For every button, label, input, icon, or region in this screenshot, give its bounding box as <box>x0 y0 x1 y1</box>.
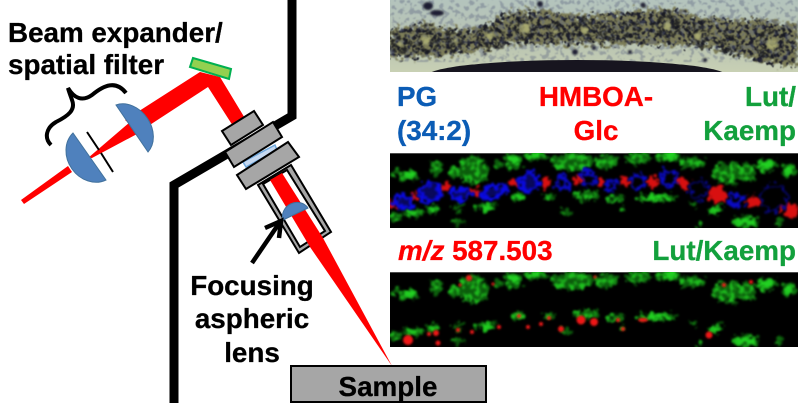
laser beam path <box>21 72 246 204</box>
mirror <box>190 58 231 79</box>
lens: focusing aspheric lens <box>282 202 308 220</box>
optical micrograph <box>390 0 798 72</box>
label: beam expander: Beam expander/ <box>8 17 223 48</box>
MS image: m/z 587.503, Lut/Kaemp <box>390 271 798 347</box>
arrow: to focusing lens <box>252 221 281 263</box>
lens tube <box>258 165 331 253</box>
label: m/z 587.503: m/z 587.503 <box>398 235 553 266</box>
sample block <box>291 366 486 402</box>
label: PG (34:2): (34:2) <box>397 115 471 146</box>
flange block 3 <box>237 142 299 189</box>
pinhole spatial filter <box>87 132 113 172</box>
label: focusing aspheric lens: aspheric <box>195 303 309 334</box>
flange block 2 <box>225 122 282 167</box>
label: HMBOA-Glc: Glc <box>574 115 618 146</box>
label: Lut/Kaemp second map: Lut/Kaemp <box>652 235 796 266</box>
label: beam expander: spatial filter <box>8 49 164 80</box>
label: focusing aspheric lens: Focusing <box>190 270 314 301</box>
lens: first beam expander lens <box>66 133 106 182</box>
focused beam to sample <box>270 173 392 366</box>
instrument wall <box>174 0 292 403</box>
window <box>243 145 277 167</box>
MS image: PG, HMBOA-Glc, Lut/Kaemp <box>387 152 799 228</box>
label: focusing aspheric lens: lens <box>224 337 280 368</box>
flange block 1 <box>222 111 263 145</box>
sample block: Sample <box>339 371 437 402</box>
label: Lut/Kaemp: Lut/ <box>745 81 796 112</box>
lens: second beam expander lens <box>116 104 153 152</box>
label: Lut/Kaemp: Kaemp <box>703 115 796 146</box>
brace: beam expander <box>47 85 126 145</box>
label: HMBOA-Glc: HMBOA- <box>539 81 653 112</box>
label: PG (34:2): PG <box>397 81 437 112</box>
